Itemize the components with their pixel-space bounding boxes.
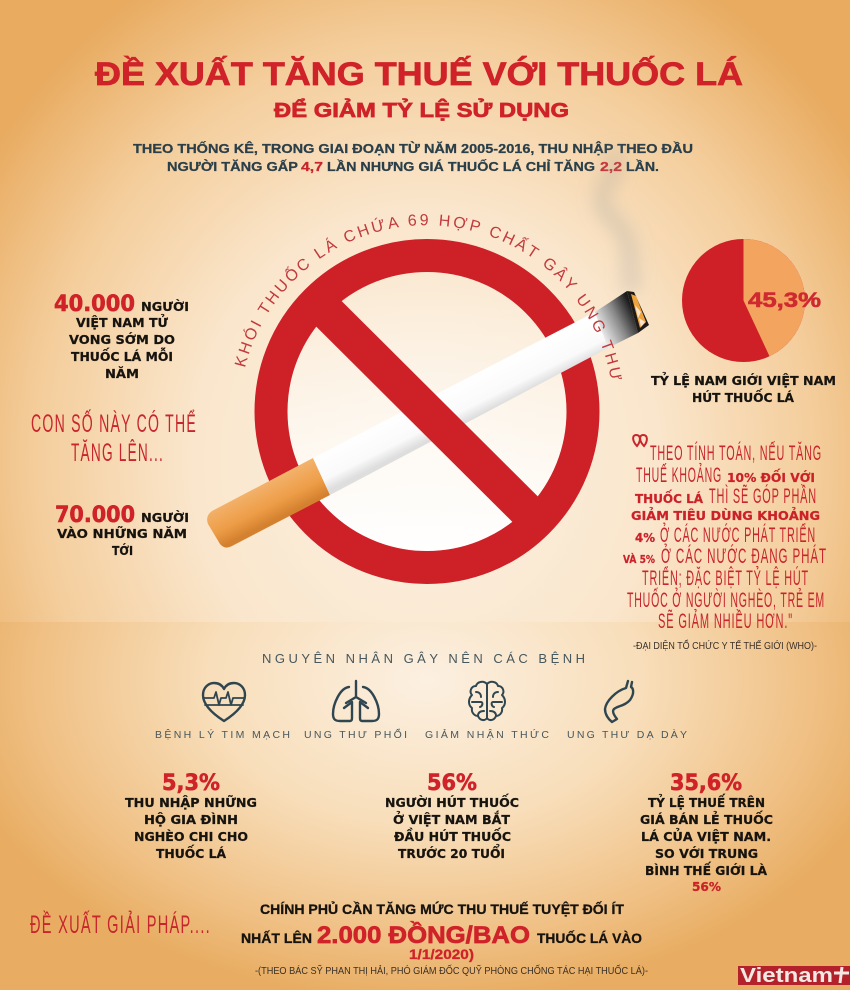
quote from WHO: 4% (635, 531, 655, 545)
stat: 70.000: 70.000 (55, 503, 135, 528)
cigarette (207, 291, 649, 548)
disease: lungs: UNG THƯ PHỔI (304, 728, 407, 741)
intro text: NGƯỜI TĂNG GẤP (167, 159, 298, 174)
icon: stomach (605, 681, 633, 722)
stat column: 56% (385, 771, 519, 861)
smoke (602, 150, 632, 292)
stat column: 35,6%: BÌNH THẾ GIỚI LÀ (645, 862, 767, 878)
stat column: 5,3%: 5,3% (162, 771, 220, 796)
title: ĐỀ XUẤT TĂNG THUẾ VỚI THUỐC LÁ (95, 56, 743, 92)
quote from WHO: THUẾ KHOẢNG (636, 464, 722, 487)
quote from WHO: 10% ĐỐI VỚI (727, 468, 815, 485)
stat column: 56%: NGƯỜI HÚT THUỐC (385, 793, 519, 810)
solution text: CHÍNH PHỦ CẦN TĂNG MỨC THU THUẾ TUYỆT ĐỐI ÍT (260, 900, 624, 917)
stat column: 35,6%: TỶ LỆ THUẾ TRÊN (648, 794, 765, 810)
quote from WHO: GIẢM TIÊU DÙNG KHOẢNG (631, 507, 820, 523)
solution heading: ĐỀ XUẤT GIẢI PHÁP.... (30, 909, 211, 939)
quote from WHO: -ĐẠI DIỆN TỔ CHỨC Y TẾ THẾ GIỚI (WHO)- (633, 639, 817, 652)
stat column: 56%: TRƯỚC 20 TUỔI (398, 844, 505, 861)
sign diagonal bar (313, 298, 541, 525)
quote from WHO: VÀ 5% (623, 553, 655, 566)
icon: lungs (333, 681, 379, 721)
stat column: 35,6%: LÁ CỦA VIỆT NAM. (641, 828, 771, 844)
logo: Vietnam+ (738, 965, 850, 987)
solution text: -(THEO BÁC SỸ PHAN THỊ HẢI, PHÓ GIÁM ĐỐC QUỸ PHÒNG CHỐNG TÁC HẠI THUỐC LÁ)- (255, 963, 648, 977)
subtitle: ĐỂ GIẢM TỶ LỆ SỬ DỤNG (274, 98, 569, 122)
intro text: 4,7 (301, 159, 323, 174)
disease: heart (155, 683, 290, 741)
callout: may increase: TĂNG LÊN... (71, 438, 164, 467)
pie caption: HÚT THUỐC LÁ (692, 388, 794, 405)
stat: 40.000 (54, 292, 189, 381)
stat column: 5,3% (125, 771, 257, 861)
icon: quotation mark (633, 435, 647, 446)
solution text: NHẤT LÊN (241, 929, 312, 946)
logo: Vietnam+: Vietnam (740, 965, 833, 987)
stat: 40.000: NĂM (105, 366, 139, 381)
stat column: 56%: ĐẦU HÚT THUỐC (394, 827, 511, 844)
callout: may increase (31, 408, 197, 467)
disease: brain: GIẢM NHẬN THỨC (425, 728, 549, 741)
stat column: 35,6%: GIÁ BÁN LẺ THUỐC (640, 810, 773, 827)
diseases heading: NGUYÊN NHÂN GÂY NÊN CÁC BỆNH (262, 651, 585, 666)
icon: brain (469, 682, 505, 720)
intro text: LẦN NHƯNG GIÁ THUỐC LÁ CHỈ TĂNG (327, 159, 595, 174)
disease: stomach: UNG THƯ DẠ DÀY (567, 728, 687, 741)
stat: 70.000: TỚI (112, 543, 133, 558)
stat: 70.000: NGƯỜI (141, 510, 189, 525)
stat column: 5,3%: NGHÈO CHI CHO (134, 829, 248, 844)
quote from WHO: THUỐC LÁ (635, 489, 704, 506)
intro text: THEO THỐNG KÊ, TRONG GIAI ĐOẠN TỪ NĂM 2005-2016, THU NHẬP THEO ĐẦU (133, 141, 693, 156)
curved caption: KHÓI THUỐC LÁ CHỨA 69 HỢP CHẤT GÂY UNG THƯ (234, 214, 622, 379)
stat: 40.000: VIỆT NAM TỬ (76, 314, 169, 330)
quote from WHO (623, 435, 827, 652)
intro text: 2,2 (600, 159, 622, 174)
pie chart 45,3%: 45,3% (748, 289, 821, 312)
intro text (133, 141, 693, 174)
disease: stomach (567, 681, 687, 741)
solution text: 2.000 ĐỒNG/BAO (317, 921, 530, 949)
stat column: 35,6%: 35,6% (670, 771, 742, 796)
stat column: 56%: 56% (427, 771, 477, 796)
stat column: 35,6%: 56% (692, 880, 721, 894)
stat column: 35,6%: SO VỚI TRUNG (655, 846, 758, 861)
stat: 40.000: NGƯỜI (141, 299, 189, 314)
no-smoking sign with cigarette (207, 256, 649, 568)
solution text: 1/1/2020) (409, 946, 474, 962)
stat column: 5,3%: HỘ GIA ĐÌNH (144, 812, 238, 827)
stat column: 5,3%: THU NHẬP NHỮNG (125, 795, 257, 810)
solution text: THUỐC LÁ VÀO (537, 929, 642, 946)
stat: 40.000: 40.000 (54, 292, 135, 317)
disease: heart: BỆNH LÝ TIM MẠCH (155, 728, 290, 741)
icon: heart (203, 683, 245, 721)
stat: 40.000: THUỐC LÁ MỖI (71, 347, 173, 364)
stat: 40.000: VONG SỚM DO (69, 332, 175, 347)
pie caption: TỶ LỆ NAM GIỚI VIỆT NAM (651, 372, 836, 388)
stat column: 56%: Ở VIỆT NAM BẮT (393, 811, 510, 827)
stat: 70.000 (55, 503, 189, 558)
pie caption (651, 372, 836, 405)
solution text (241, 900, 648, 977)
stat column: 35,6% (640, 771, 773, 894)
callout: may increase: CON SỐ NÀY CÓ THỂ (31, 408, 197, 438)
disease: lungs (304, 681, 407, 741)
disease: brain (425, 682, 549, 741)
intro text: LẦN. (626, 159, 659, 174)
stat: 70.000: VÀO NHỮNG NĂM (57, 526, 187, 541)
sign ring (271, 256, 583, 568)
pie chart 45,3% (682, 239, 821, 362)
stat column: 5,3%: THUỐC LÁ (156, 844, 226, 861)
